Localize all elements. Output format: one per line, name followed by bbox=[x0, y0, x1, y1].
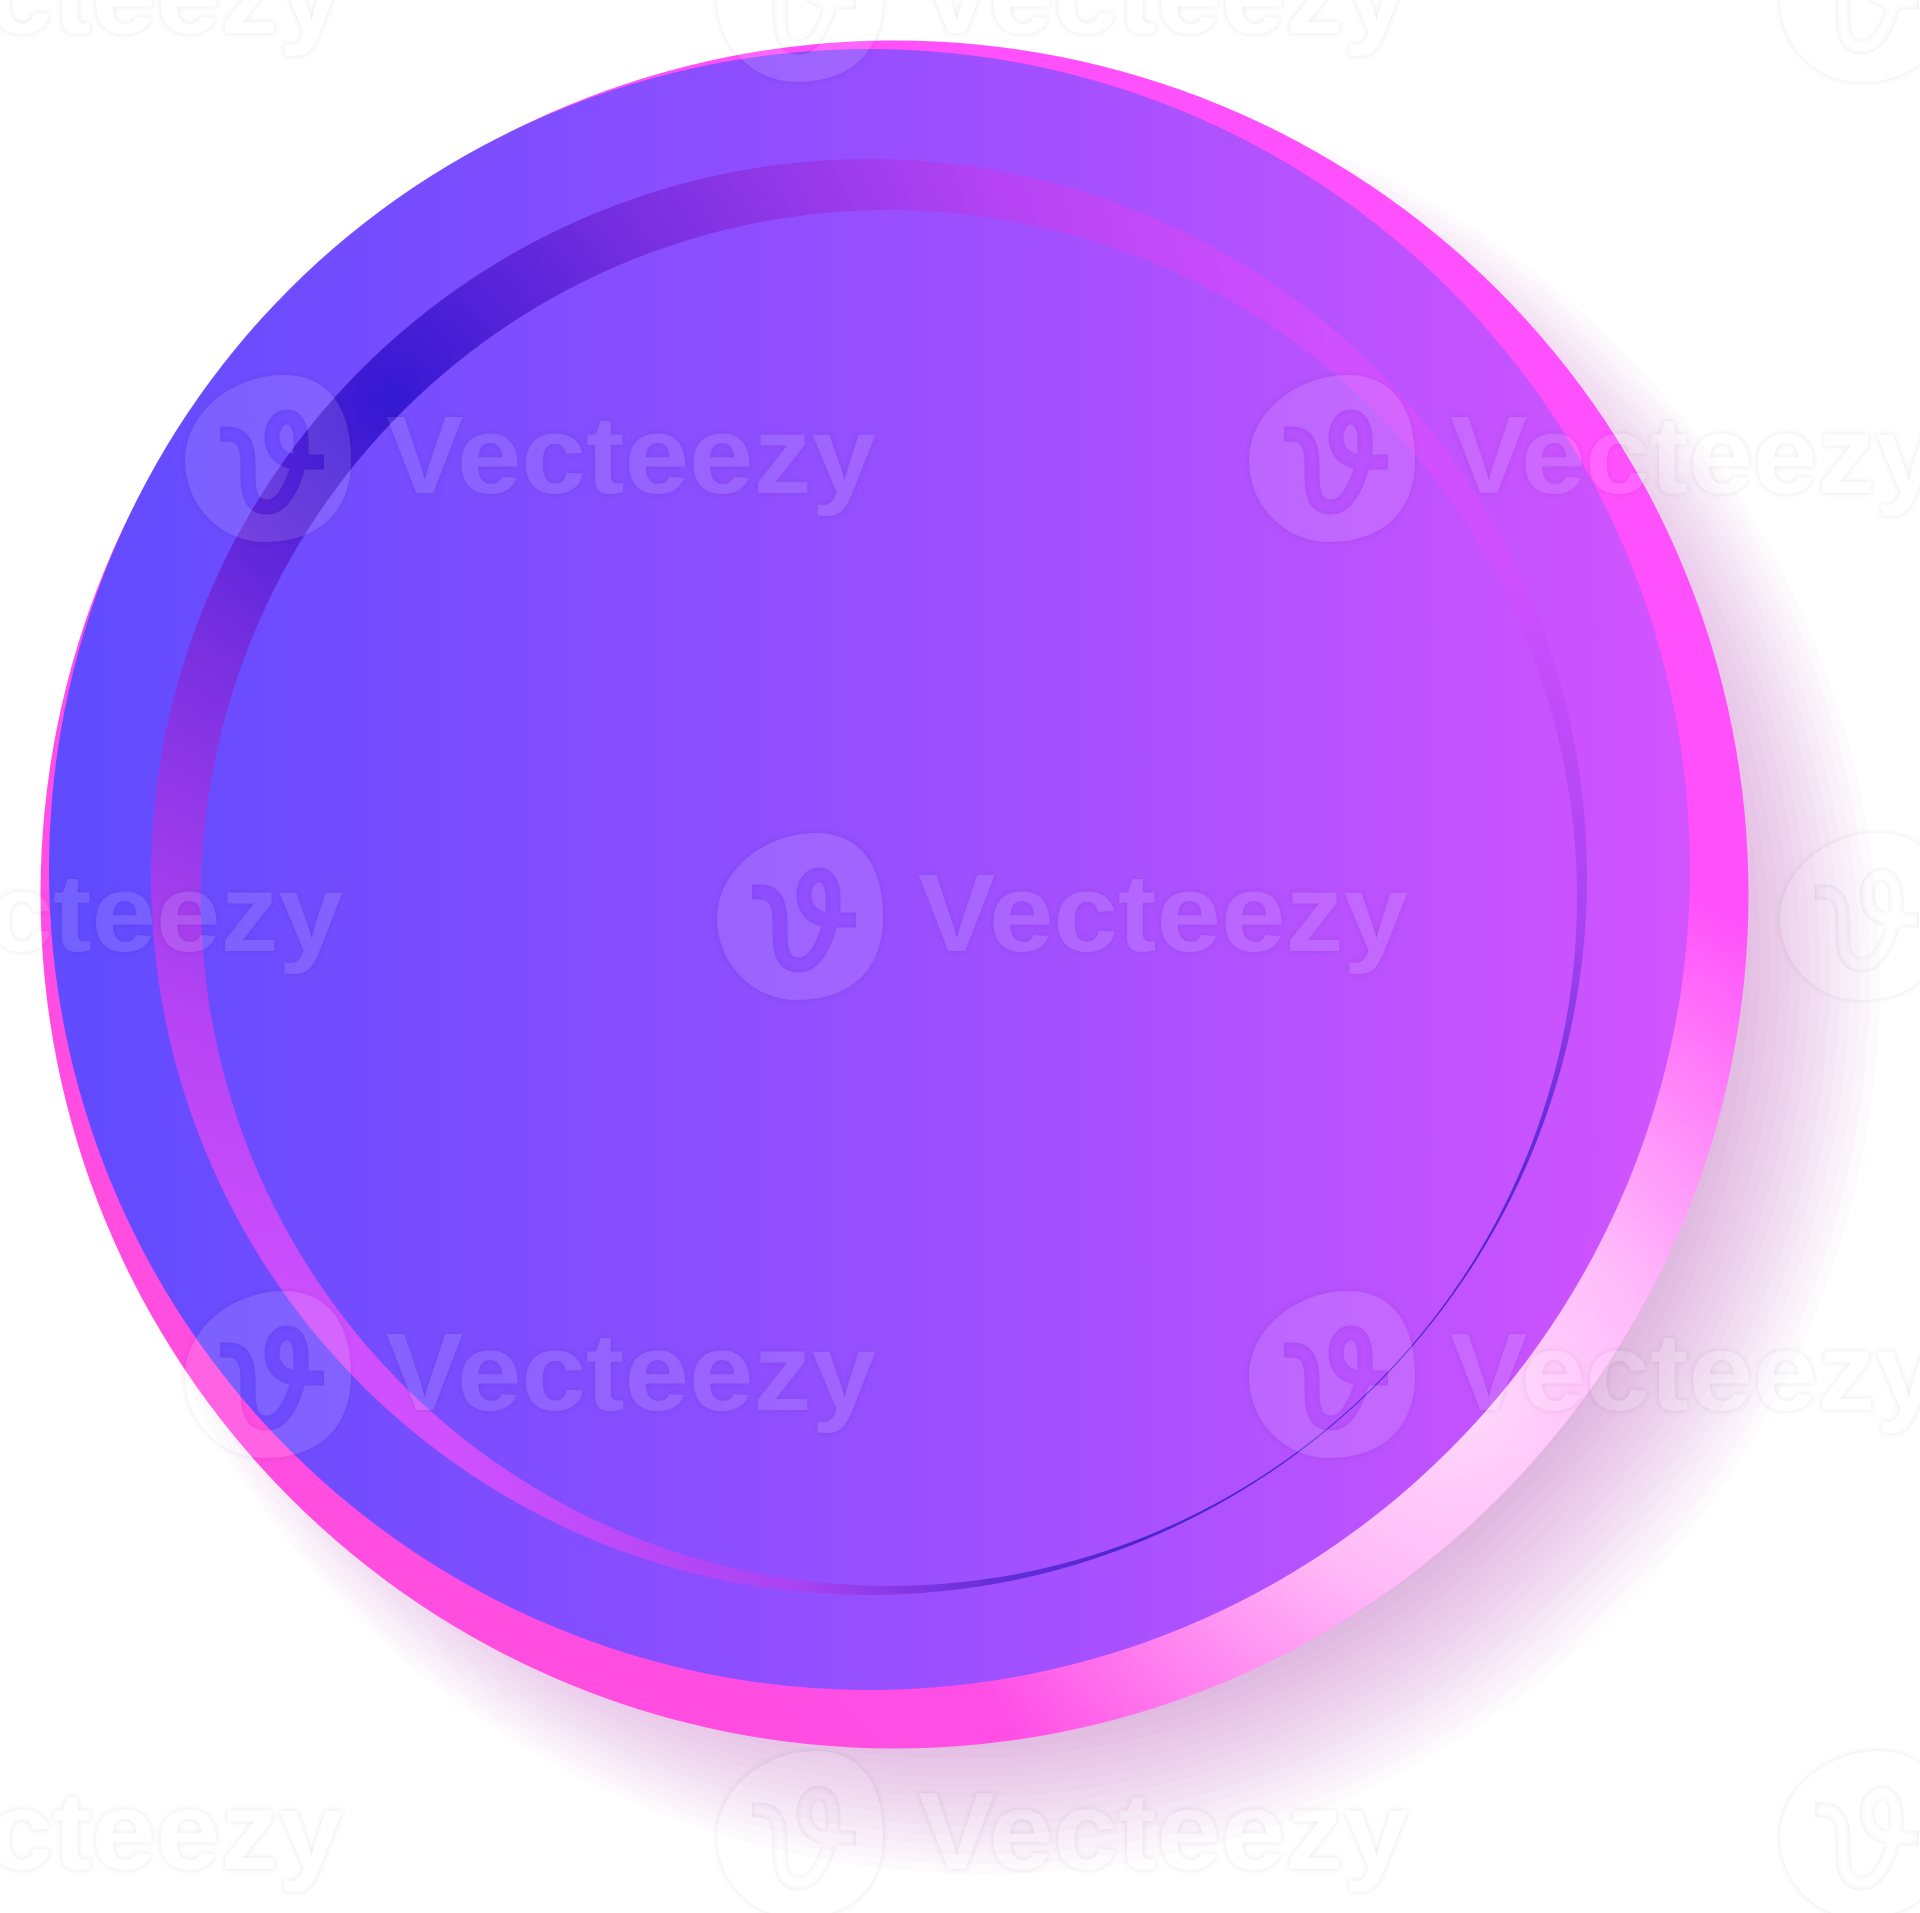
inner purple disc bbox=[201, 210, 1577, 1586]
watermark row 2: Vecteezy bbox=[1450, 394, 1920, 517]
watermark row 1 bbox=[0, 0, 1920, 82]
watermark row 3: Vecteezy bbox=[918, 852, 1408, 975]
main purple disc bbox=[49, 49, 1690, 1690]
watermark row 5: Vecteezy bbox=[918, 1770, 1408, 1893]
outer pink disc bbox=[40, 40, 1748, 1748]
watermark row 2 bbox=[185, 375, 1920, 542]
watermark row 3 bbox=[0, 833, 1920, 1000]
watermark row 4: Vecteezy bbox=[1450, 1311, 1920, 1434]
watermark row 5 bbox=[0, 1751, 1920, 1913]
inner gradient ring bbox=[151, 159, 1587, 1595]
watermark row 2: Vecteezy bbox=[386, 394, 876, 517]
watermark row 4: Vecteezy bbox=[386, 1311, 876, 1434]
watermark row 4 bbox=[185, 1291, 1920, 1458]
